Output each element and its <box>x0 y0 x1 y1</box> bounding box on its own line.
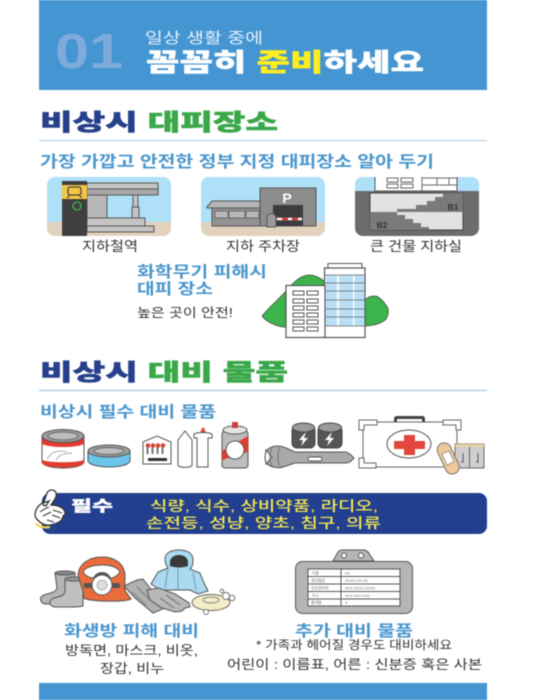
panel: building basement: B2 <box>377 220 388 230</box>
banner list: 손전등, 성냥, 양초, 침구, 의류 <box>146 515 381 531</box>
icon: high-rise buildings on a hill <box>262 264 388 338</box>
panel: underground parking: P <box>282 190 292 206</box>
icon: canned food <box>42 430 130 468</box>
icon: gas canister <box>222 422 248 468</box>
label: parking: 지하 주차장 <box>226 239 300 254</box>
panel: building basement: B1 <box>448 202 459 212</box>
text block: chemical weapons <box>137 263 267 320</box>
text block: chemical weapons: 화학무기 피해시 <box>137 263 267 281</box>
panel: building basement <box>355 170 479 236</box>
icon: batteries and flashlight <box>265 423 354 468</box>
ID card fields: X <box>345 601 348 605</box>
text block: additional supplies <box>227 622 482 672</box>
footer band <box>39 683 487 700</box>
icon: gas mask <box>78 557 131 601</box>
text block: chemical weapons: 높은 곳이 안전! <box>137 306 233 320</box>
banner list: 식량, 식수, 상비약품, 라디오, <box>150 498 378 514</box>
text block: CBRN preparation: 화생방 피해 대비 <box>64 622 199 640</box>
ID card fields: XXX-XXXX-XXXX <box>345 586 376 590</box>
panel: subway station <box>47 177 171 236</box>
text block: additional supplies: 어린이 : 이름표, 어른 : 신분증 혹은 사본 <box>227 657 482 672</box>
icon: pointing hand <box>35 490 65 527</box>
text block: additional supplies: 추가 대비 물품 <box>295 622 413 640</box>
heading: emergency supplies: 비상시 대비 물품 <box>40 359 288 385</box>
section number: 01 <box>55 25 123 79</box>
icon: soap <box>192 589 235 614</box>
label: basement: 큰 건물 지하실 <box>370 239 462 254</box>
icon: first aid kit <box>359 416 484 476</box>
ID card fields: XXX XXX XXX <box>345 594 370 598</box>
ID card fields: XXXX-XX-XX <box>345 579 368 583</box>
text block: chemical weapons: 대피 장소 <box>137 280 213 298</box>
text block: additional supplies: * 가족과 헤어질 경우도 대비하세요 <box>256 638 452 652</box>
icon: matches and candles <box>143 427 212 467</box>
text block: CBRN preparation: 방독면, 마스크, 비옷, <box>65 643 198 658</box>
header banner <box>39 0 487 90</box>
header title: 꼼꼼히 준비 하세요 <box>146 49 424 77</box>
callout: essentials banner <box>42 493 487 534</box>
ID card fields: XX <box>345 572 351 576</box>
ID card fields: 주소 <box>312 593 319 598</box>
text block: CBRN preparation: 장갑, 비누 <box>100 661 164 676</box>
ID card fields: 부모연락처 <box>311 586 329 590</box>
ID card fields: 생년월일 <box>311 578 325 583</box>
icon: boots <box>41 571 83 607</box>
heading: emergency shelter: 비상시 대피장소 <box>40 109 278 135</box>
panel: underground parking <box>201 177 325 236</box>
icon: ID card <box>296 550 412 614</box>
icon: protective suit <box>151 550 208 594</box>
icon: gloves <box>124 579 190 613</box>
subheading: essentials: 비상시 필수 대비 물품 <box>40 403 216 421</box>
ID card fields: 혈액형 <box>311 600 322 605</box>
subheading: shelter: 가장 가깝고 안전한 정부 지정 대피장소 알아 두기 <box>40 153 434 171</box>
ID card fields: 이름 <box>312 570 319 576</box>
banner label: 필수 <box>71 498 113 515</box>
label: subway: 지하철역 <box>82 239 138 254</box>
text block: CBRN preparation <box>64 622 199 676</box>
header subtitle: 일상 생활 중에 <box>145 30 263 47</box>
